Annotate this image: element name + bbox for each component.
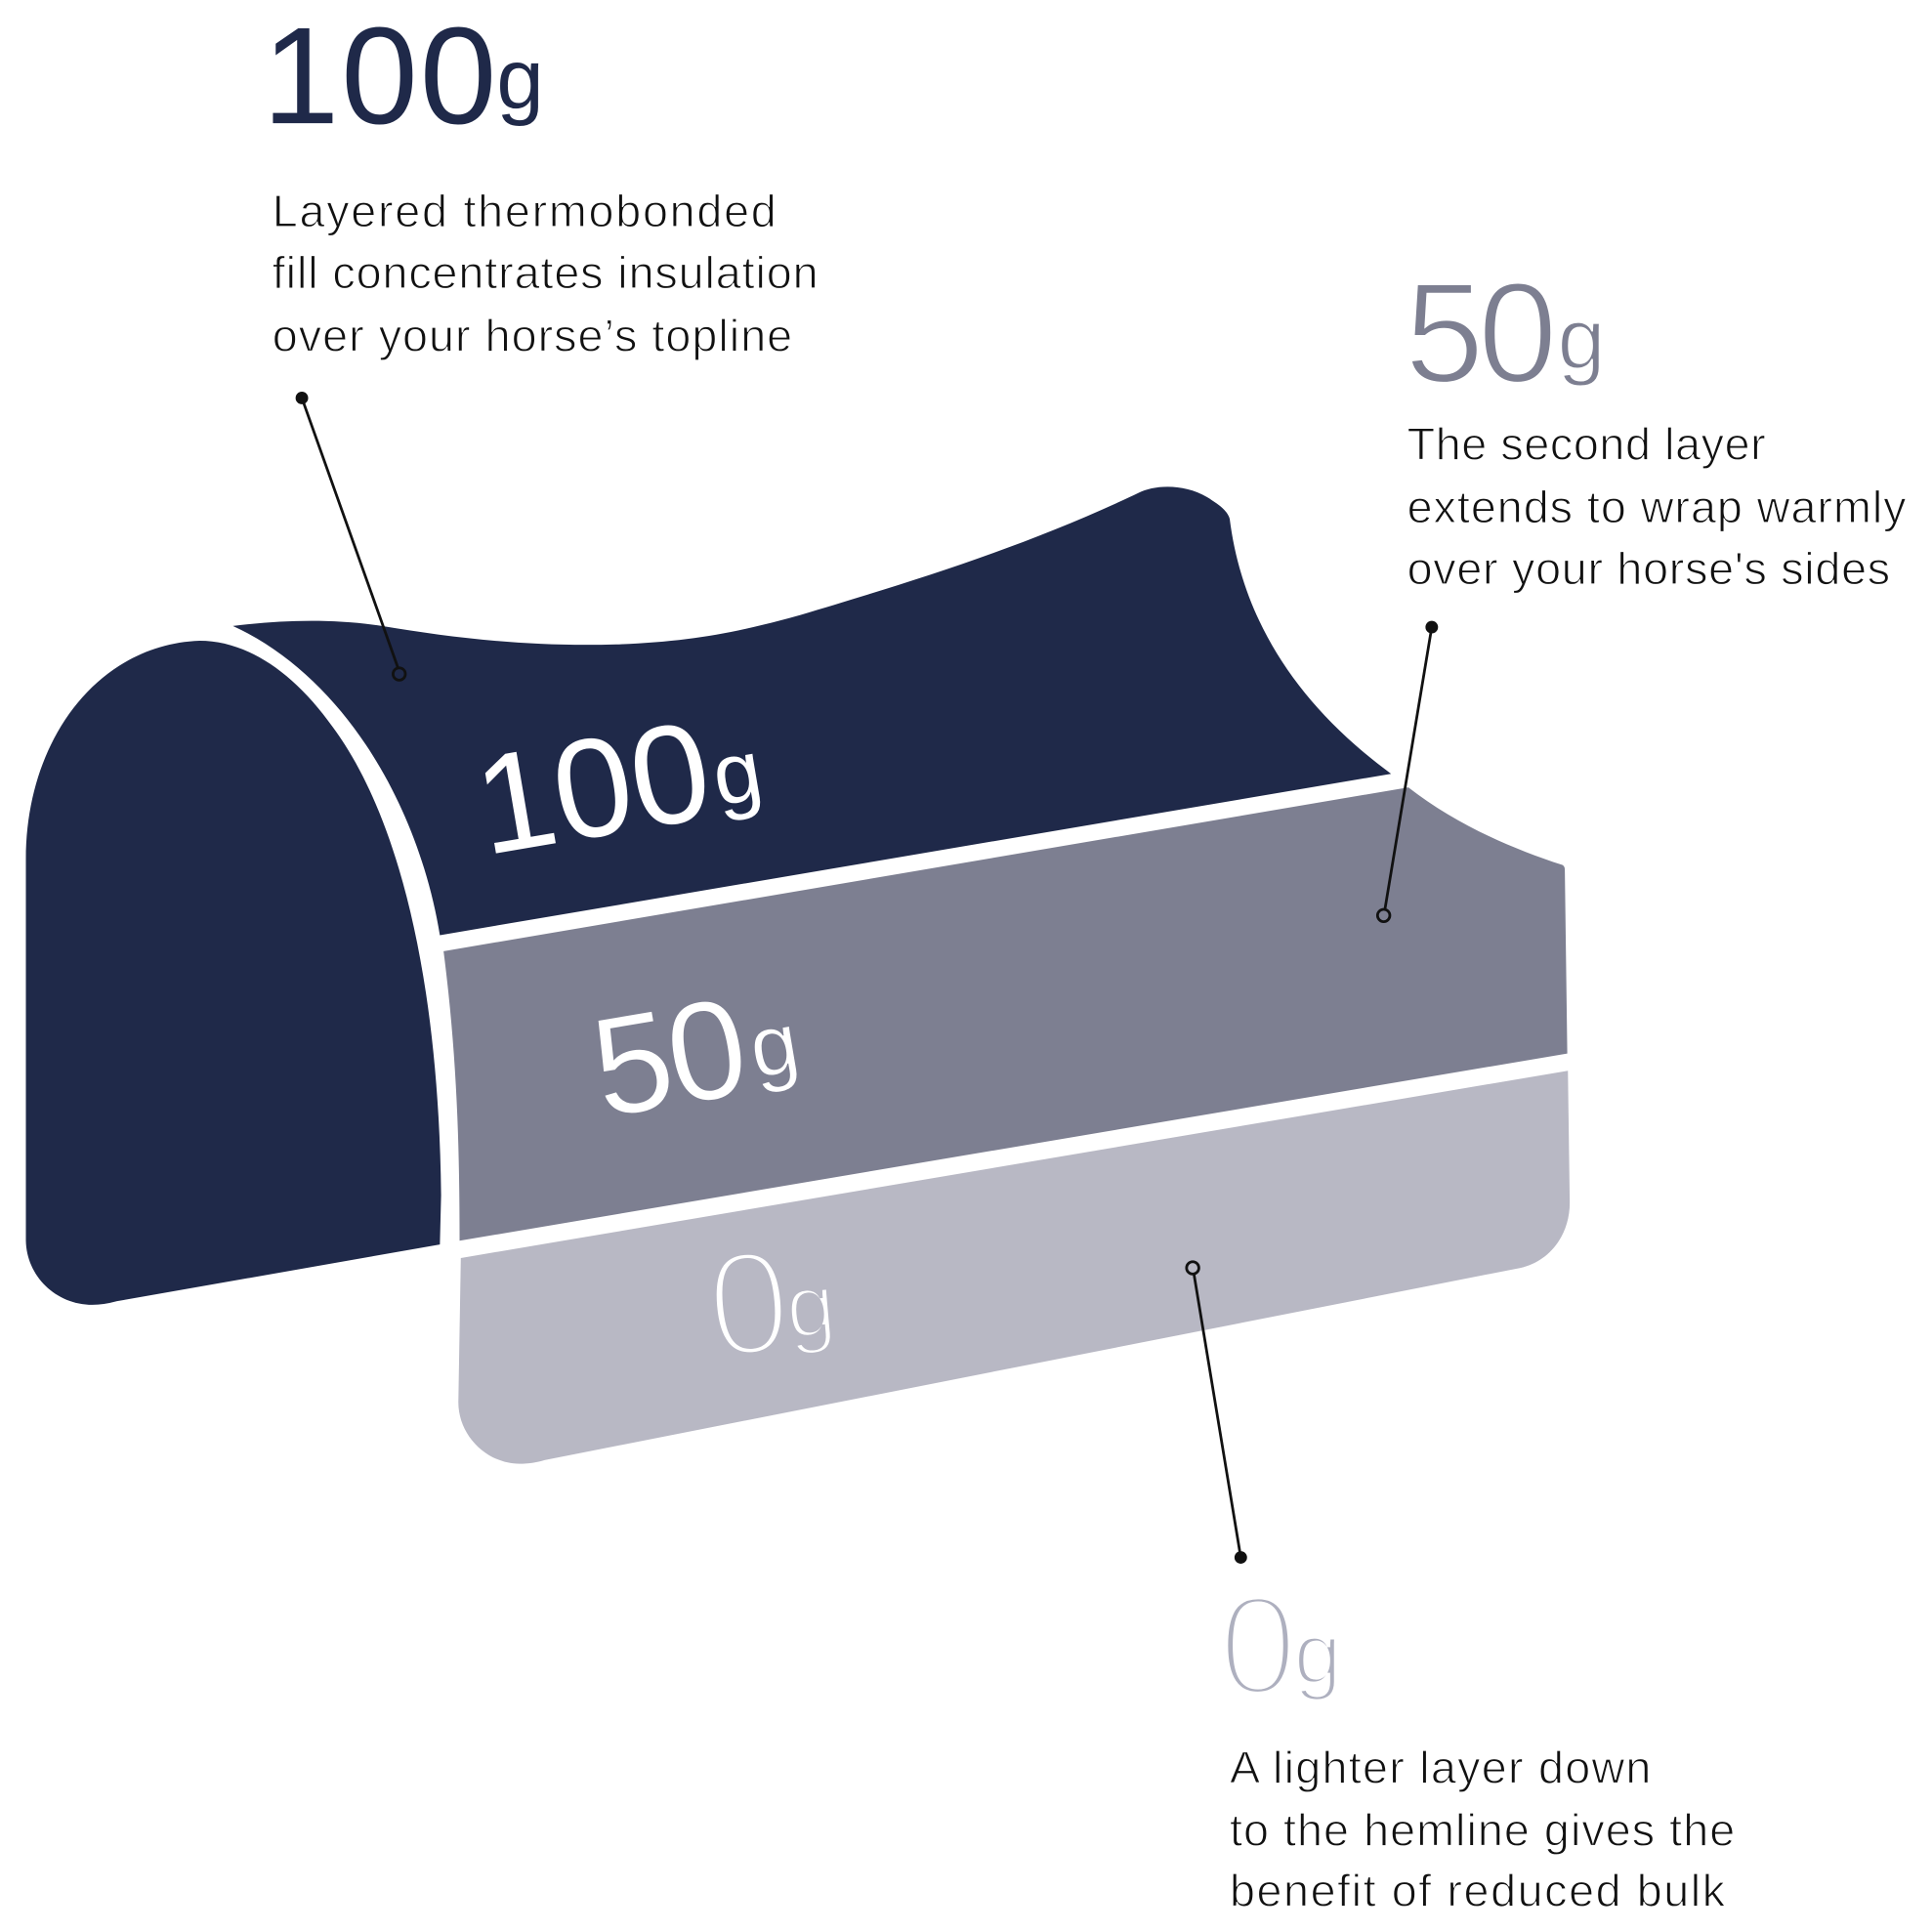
text block: 50g description: extends to wrap warmly — [1407, 482, 1907, 532]
panel: 100g top layer — [232, 486, 1391, 935]
text block: 50g description: over your horse's sides — [1407, 543, 1890, 594]
text block: 0g description: benefit of reduced bulk — [1230, 1866, 1726, 1916]
text block: 0g description — [1230, 1742, 1735, 1916]
text block: 50g description — [1407, 419, 1907, 594]
text block: 100g description: over your horse’s topline — [273, 311, 792, 361]
label: 0g on panel — [700, 1218, 839, 1390]
label: 0g on panel: g — [781, 1255, 839, 1358]
label: 100g on panel: g — [705, 721, 769, 824]
label: 50g on panel: g — [742, 993, 806, 1097]
text block: 50g description: The second layer — [1407, 419, 1766, 470]
label: 0g on panel: 0 — [700, 1218, 797, 1390]
heading: 100g: 100 — [263, 0, 496, 152]
label: 50g on panel: 50 — [581, 968, 758, 1148]
heading: 0g: 0 — [1219, 1567, 1297, 1725]
text block: 100g description — [273, 186, 819, 361]
text block: 0g description: to the hemline gives the — [1230, 1805, 1735, 1856]
label: 100g on panel: 100 — [465, 692, 722, 885]
leader line: 50g callout — [1377, 622, 1437, 922]
text block: 0g description: A lighter layer down — [1230, 1742, 1651, 1792]
leader line: 100g callout — [297, 393, 405, 680]
text block: 100g description: fill concentrates insulation — [273, 247, 819, 298]
heading: 50g: g — [1558, 290, 1606, 387]
text block: 100g description: Layered thermobonded — [273, 186, 777, 236]
heading: 0g — [1219, 1567, 1342, 1725]
heading: 50g: 50 — [1405, 254, 1558, 413]
diagram: layered rug cross-section — [25, 486, 1570, 1464]
heading: 0g: g — [1294, 1605, 1342, 1701]
panel: front neck block — [25, 641, 441, 1305]
heading: 100g: g — [496, 32, 544, 127]
panel: 50g middle layer — [443, 787, 1568, 1240]
leader line: 0g callout — [1187, 1262, 1245, 1563]
panel: 0g bottom layer — [458, 1071, 1570, 1464]
